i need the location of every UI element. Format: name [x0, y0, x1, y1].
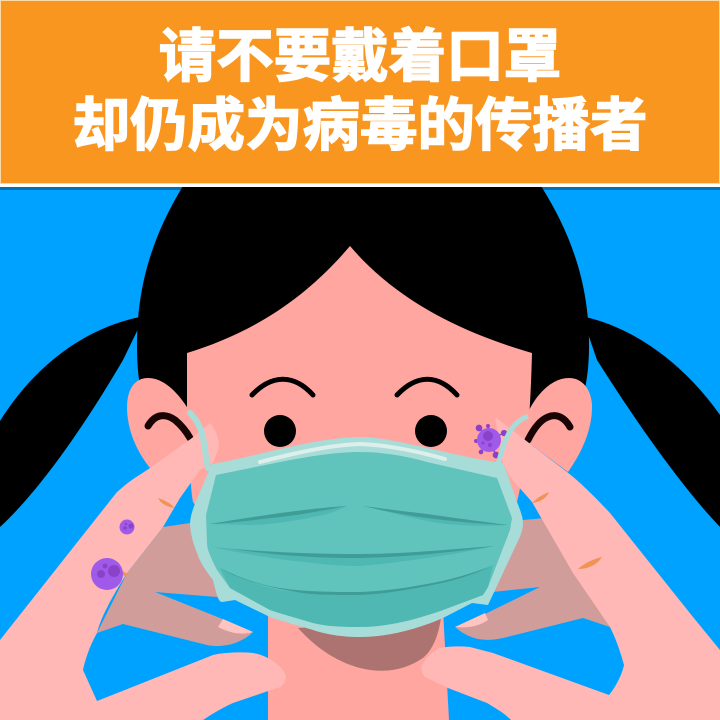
virus: small on left hand	[120, 520, 134, 534]
hair pigtails	[0, 317, 720, 527]
fingernail	[218, 619, 253, 634]
surgical mask	[190, 437, 523, 637]
virus: large on left hand	[91, 558, 123, 590]
nose wire	[260, 444, 445, 462]
neck shadow	[298, 618, 441, 671]
left hand	[0, 423, 286, 720]
mask folds	[210, 506, 508, 595]
title: 却仍成为病毒的传播者	[72, 94, 648, 158]
eyebrows	[252, 379, 457, 395]
ear loops	[190, 413, 526, 468]
virus: on cheek	[475, 425, 506, 458]
fingernail	[455, 613, 488, 627]
back fingers, right	[455, 518, 610, 640]
title: 请不要戴着口罩	[159, 25, 561, 89]
ear inner marks	[148, 416, 570, 440]
hair dome	[137, 186, 589, 420]
left ear	[127, 378, 192, 468]
right ear	[525, 378, 592, 472]
right hand	[421, 417, 720, 720]
mask body	[206, 452, 512, 627]
title	[72, 25, 648, 158]
back fingers, left	[97, 523, 253, 646]
girl face and neck	[127, 246, 532, 720]
orange marks on hands	[122, 492, 602, 576]
lower mask panel	[220, 565, 493, 627]
header banner	[0, 0, 720, 190]
mask edge	[190, 437, 523, 637]
eyes	[264, 415, 447, 447]
